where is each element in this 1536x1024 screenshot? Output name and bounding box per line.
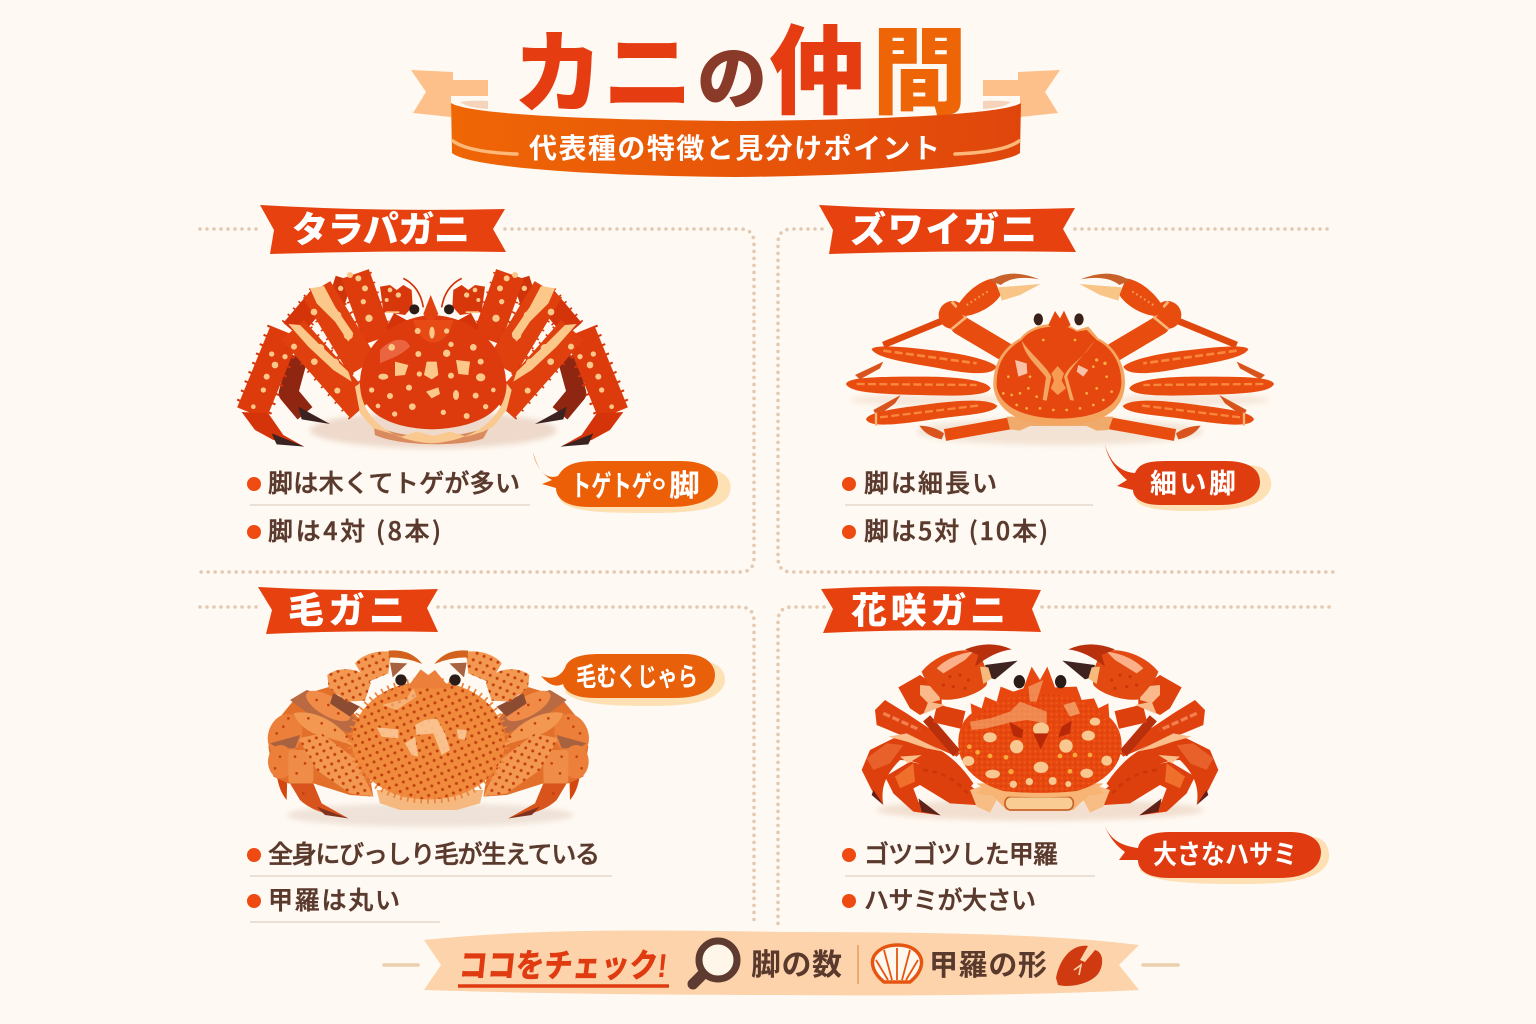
heading: 花咲ガニ: 花咲ガニ (851, 590, 1006, 631)
icon: magnifying glass (693, 941, 737, 984)
label: 脚の数: 脚の数 (751, 949, 842, 982)
bullet list (842, 464, 1093, 548)
heading: 毛ガニ (258, 587, 438, 634)
callout: 毛むくじゃら (541, 654, 725, 706)
bullet list (247, 464, 530, 548)
title text: カ (513, 25, 603, 125)
label: 甲羅の形: 甲羅の形 (929, 949, 1047, 982)
panel: 毛ガニ (247, 587, 725, 922)
callout: 毛むくじゃら: 毛むくじゃら (576, 662, 698, 692)
callout: トゲトゲ脚 (533, 452, 731, 513)
panel frames: dotted lines (200, 229, 1333, 925)
title banner (411, 18, 1060, 177)
illustration: hairy crab (262, 650, 595, 827)
title text: ニ (603, 25, 693, 125)
heading: タラパガニ: タラパガニ (292, 209, 470, 250)
heading: タラパガニ (260, 205, 506, 254)
heading: 毛ガニ: 毛ガニ (288, 590, 405, 631)
callout: トゲトゲ脚: トゲトゲ (571, 470, 652, 503)
panel: タラパガニ (242, 205, 731, 548)
heading: ズワイガニ: ズワイガニ (850, 209, 1037, 250)
bottom banner: ココをチェック (384, 931, 1178, 995)
bullet list: 脚は5対 (10本) (864, 512, 1048, 548)
bullet list: 甲羅は丸い (268, 881, 400, 917)
bullet list: ハサミが大さい (864, 881, 1036, 917)
title text: 間 (872, 21, 967, 127)
bullet list: ゴツゴツした甲羅 (864, 835, 1058, 871)
subtitle: 代表種の特徴と見分けポイント (529, 133, 940, 164)
bullet list: 脚は4対 (8本) (268, 512, 441, 548)
heading: 花咲ガニ (821, 586, 1041, 633)
callout: 細い脚 (1105, 445, 1271, 511)
callout: 細い脚: 細い脚 (1150, 469, 1236, 499)
bullet list (247, 835, 612, 922)
illustration: hanasaki crab (862, 644, 1218, 821)
ribbon body (451, 103, 1021, 177)
title text (513, 18, 967, 127)
bullet list (842, 835, 1095, 917)
bullet list: 全身にびっしり毛が生えている (268, 835, 600, 871)
callout: 大さなハサミ (1104, 824, 1329, 884)
bullet list: 脚は細長い (864, 464, 997, 500)
title text: 仲 (769, 18, 866, 127)
title text: の (697, 40, 767, 118)
heading: ズワイガニ (819, 205, 1076, 254)
bullet list: 脚は木くてトゲが多い (268, 464, 520, 500)
check heading: ココをチェック! (457, 948, 669, 985)
callout: 大さなハサミ: 大さなハサミ (1153, 840, 1297, 870)
panel: 花咲ガニ (821, 586, 1329, 917)
panel: ズワイガニ (819, 205, 1274, 548)
callout: トゲトゲ脚: 脚 (669, 470, 700, 503)
icon: shell (872, 945, 922, 982)
ribbon tails (411, 70, 1060, 117)
illustration: snow crab (846, 274, 1274, 445)
illustration: king crab (242, 272, 623, 448)
icon: claw (1056, 946, 1102, 986)
